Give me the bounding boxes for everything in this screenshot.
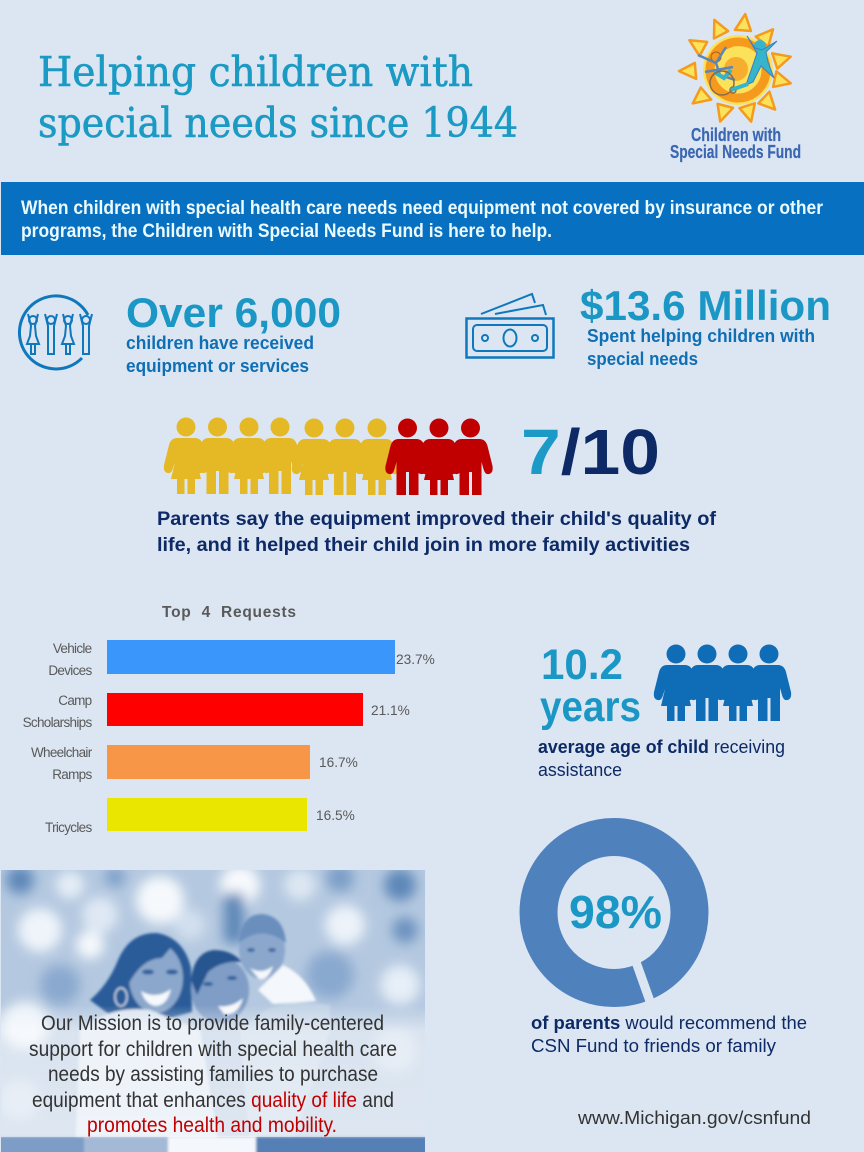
- figure and caption: children have received: [126, 333, 314, 353]
- figure and caption: $13.6 Million: [580, 282, 831, 329]
- logo wordmark: Children with: [691, 125, 781, 145]
- figure and caption: special needs: [587, 349, 698, 369]
- man: [191, 957, 249, 1023]
- caption: assistance: [538, 760, 622, 780]
- figure and caption: Over 6,000: [126, 289, 341, 336]
- category labels: Tricycles: [45, 820, 92, 835]
- title: Helping children with: [38, 48, 473, 96]
- caption: [538, 737, 785, 780]
- text: parents say: life, and it helped their child join in more family activities: [157, 535, 690, 556]
- mission text: equipment that enhances quality of life and: [32, 1089, 394, 1112]
- pictogram: family: [654, 644, 791, 721]
- category labels: Vehicle: [53, 641, 92, 656]
- banner: programs, the Children with Special Needs Fund is here to help.: [21, 221, 552, 242]
- category labels: Ramps: [52, 767, 92, 782]
- icon: banknotes: [466, 294, 554, 358]
- woman: [90, 933, 192, 1018]
- figure and caption: Spent helping children with: [587, 326, 815, 346]
- mission text: [29, 1012, 397, 1137]
- text: recommend: CSN Fund to friends or family: [531, 1036, 776, 1056]
- title: [38, 48, 518, 147]
- bars: [107, 640, 395, 831]
- mission text: support for children with special health care: [29, 1038, 397, 1061]
- bottom shirts: [0, 1137, 431, 1152]
- figure and caption: [126, 289, 341, 376]
- donut chart: 98%: [538, 837, 690, 1004]
- mission text: Our Mission is to provide family-centered: [41, 1012, 384, 1035]
- stat: 10.2 years: 10.2: [541, 641, 623, 689]
- logo wordmark: Special Needs Fund: [670, 142, 801, 162]
- value: 98%: [569, 886, 662, 938]
- figure and caption: [580, 282, 831, 369]
- icon: sun with children: [679, 13, 793, 124]
- photo panel with mission statement: [0, 864, 431, 1152]
- category labels: Camp: [58, 693, 92, 708]
- value labels: 16.7%: [319, 755, 358, 770]
- category labels: Wheelchair: [31, 745, 93, 760]
- website: www.Michigan.gov/csnfund: [577, 1108, 811, 1128]
- chart title: Top 4 Requests: [162, 604, 296, 621]
- mission text: needs by assisting families to purchase: [48, 1063, 378, 1086]
- figure and caption: equipment or services: [126, 356, 309, 376]
- stat: 10.2 years: [538, 641, 791, 780]
- stat: 7/10: 7/10: [521, 416, 660, 488]
- text: recommend: of parents would recommend the: [531, 1013, 807, 1033]
- category labels: Devices: [48, 663, 92, 678]
- text: parents say: Parents say the equipment improved their child's quality of: [157, 509, 717, 530]
- value labels: 16.5%: [316, 808, 355, 823]
- text: recommend: [531, 1013, 807, 1056]
- stat: over 6,000 children: [19, 289, 341, 376]
- caption: average age of child receiving: [538, 737, 785, 757]
- value labels: [316, 652, 435, 823]
- boy: [238, 932, 286, 979]
- text: parents say: [157, 509, 717, 556]
- bar chart: top 4 requests: [23, 604, 435, 835]
- category labels: [23, 641, 93, 835]
- banner: [1, 182, 864, 255]
- title: special needs since 1944: [38, 99, 518, 147]
- value labels: 23.7%: [396, 652, 435, 667]
- category labels: Scholarships: [23, 715, 92, 730]
- pictogram: 7 of 10 parents: [164, 418, 493, 495]
- logo: Children with Special Needs Fund: [670, 13, 801, 162]
- icon: children in circle: [19, 296, 92, 369]
- stat: 10.2 years: years: [540, 683, 641, 731]
- photo: family: [0, 864, 431, 1152]
- value labels: 21.1%: [371, 703, 410, 718]
- stat: $13.6 million: [466, 282, 831, 369]
- logo wordmark: [670, 125, 801, 162]
- mission text: promotes health and mobility.: [87, 1114, 337, 1137]
